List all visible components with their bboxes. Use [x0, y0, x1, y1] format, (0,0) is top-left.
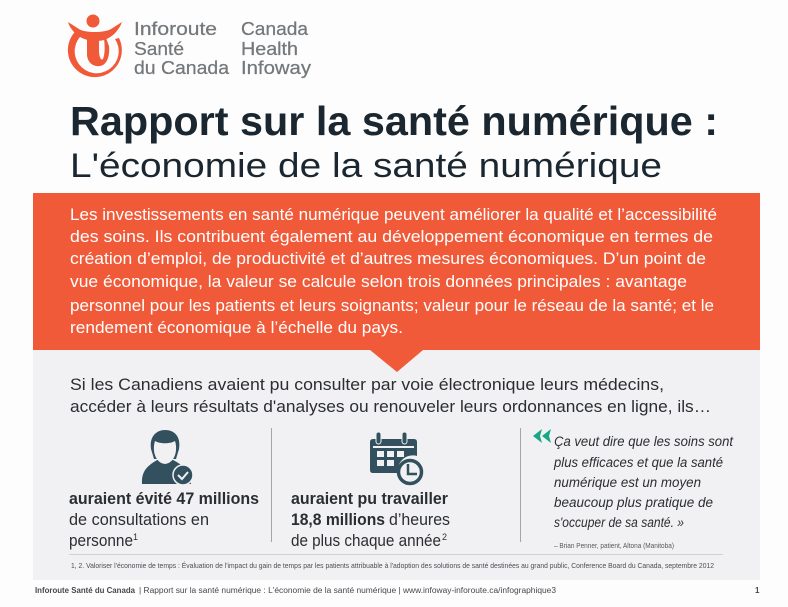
page footer [35, 586, 760, 595]
divider: above footnote [69, 554, 723, 555]
text block: patient quote: beaucoup plus pratique de [554, 495, 713, 510]
text block: extra work hours: de plus chaque année [291, 532, 441, 550]
text block: introduction: personnel pour les patients et leurs soignants; valeur pour le réseau de la santé; et le [70, 297, 714, 315]
text block: lead-in sentence: accéder à leurs résultats d'analyses ou renouveler leurs ordonnances en ligne, ils… [70, 397, 711, 416]
quote attribution: – Brian Penner, patient, Altona (Manitoba) [554, 541, 674, 550]
text block: patient quote: Ça veut dire que les soins sont [554, 434, 734, 449]
text block: extra work hours: 18,8 millions [291, 511, 385, 529]
text block: extra work hours [291, 490, 450, 550]
text block: patient quote: s'occuper de sa santé. » [554, 515, 684, 530]
page footer: | Rapport sur la santé numérique : L'économie de la santé numérique | www.infoway-inforoute.ca/infographique3 [139, 586, 557, 595]
logo text: French name: Inforoute [134, 18, 217, 39]
icon: opening quotation mark [533, 429, 551, 443]
subtitle: L'économie de la santé numérique [70, 147, 662, 185]
logo text: English name [241, 18, 312, 78]
text block: avoided consultations: personne [69, 532, 133, 550]
divider: second column [520, 428, 521, 542]
text block: introduction: vue économique, la valeur se calcule selon trois données principales : avantage [70, 273, 687, 291]
text block: avoided consultations: de consultations en [69, 511, 209, 529]
icon: person with check mark [142, 430, 193, 485]
icon: orange figure [68, 14, 122, 77]
text block: extra work hours: 2 [442, 532, 447, 542]
text block: patient quote [553, 434, 734, 530]
logo text: English name: Canada [241, 18, 309, 39]
text block: avoided consultations [69, 490, 259, 550]
text block: patient quote: numérique est un moyen [554, 475, 701, 490]
logo: Canada Health Infoway [68, 14, 312, 78]
text block: avoided consultations: 1 [133, 532, 138, 542]
panel: orange introduction [33, 193, 760, 372]
text block: extra work hours: d’heures [389, 511, 450, 529]
panel: grey lower section [33, 350, 760, 580]
text block: introduction [70, 206, 717, 337]
logo text: French name [134, 18, 230, 78]
logo text: English name: Health [241, 38, 298, 59]
text block: introduction: création d’emploi, de productivité et d’autres mesures économiques. D’un point de [70, 250, 706, 268]
page footer: 1 [755, 586, 760, 595]
icon: calendar with clock [370, 432, 422, 484]
text block: patient quote: plus efficaces et que la santé [553, 455, 723, 470]
text block: introduction: des soins. Ils contribuent également au développement économique en termes de [70, 228, 713, 246]
footnote: 1, 2. Valoriser l'économie de temps : Évaluation de l'impact du gain de temps par les patients attribuable à l'adoption des solutions de santé destinées au grand public, Conference Board du Canada, septembre 2012 [71, 561, 714, 570]
text block: introduction: Les investissements en santé numérique peuvent améliorer la qualité et l’accessibilité [70, 206, 717, 224]
title: Rapport sur la santé numérique : [70, 98, 718, 144]
text block: lead-in sentence [70, 375, 711, 416]
logo text: English name: Infoway [241, 57, 312, 78]
page footer: Inforoute Santé du Canada [35, 586, 136, 595]
text block: lead-in sentence: Si les Canadiens avaient pu consulter par voie électronique leurs médecins, [70, 375, 664, 394]
text block: introduction: rendement économique à l’échelle du pays. [70, 319, 403, 337]
logo text: French name: Santé [134, 38, 184, 59]
divider: first column [271, 428, 272, 542]
text block: avoided consultations: auraient évité 47 millions [69, 490, 259, 508]
logo text: French name: du Canada [134, 57, 230, 78]
text block: extra work hours: auraient pu travailler [291, 490, 449, 508]
